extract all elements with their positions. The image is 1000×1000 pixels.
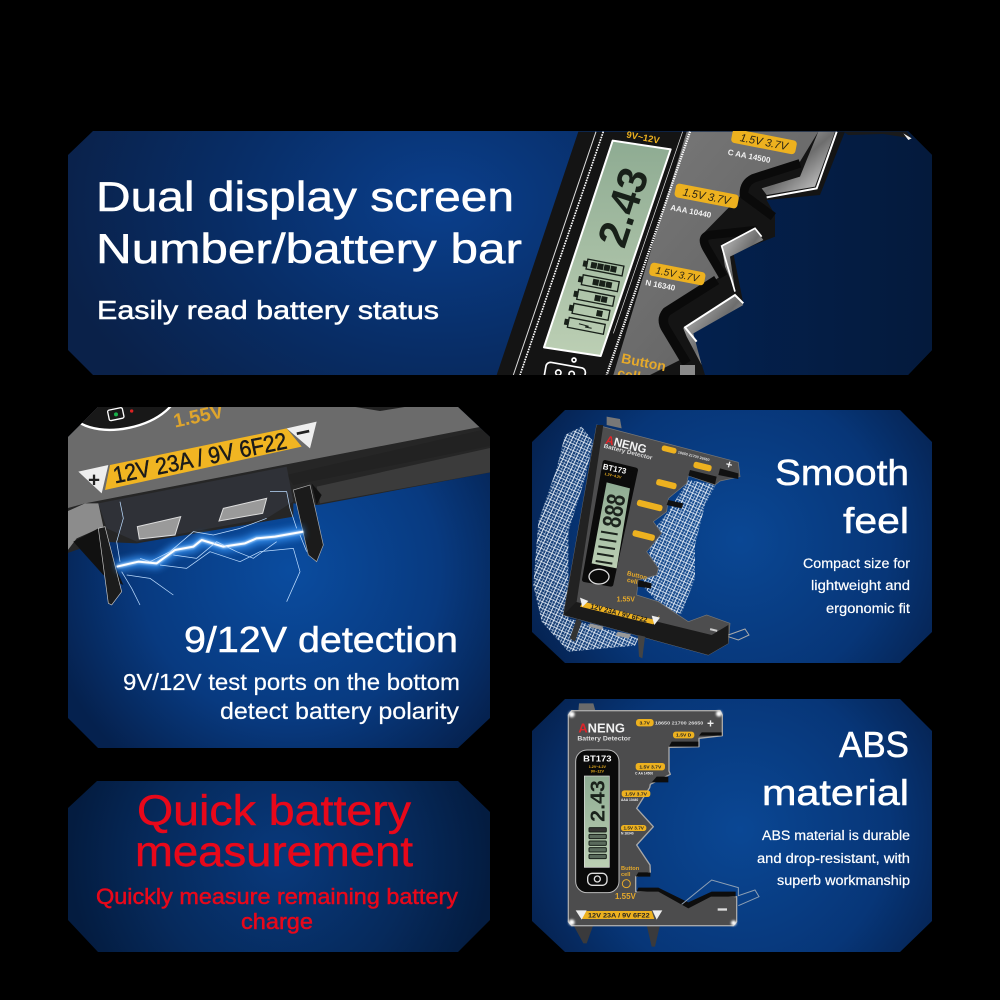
description: charge bbox=[241, 909, 313, 934]
heading: measurement bbox=[135, 828, 413, 876]
description: Compact size for bbox=[803, 556, 911, 571]
mesh hand bbox=[533, 427, 716, 652]
voltage labels: cell bbox=[616, 365, 642, 385]
heading: Smooth bbox=[775, 452, 909, 493]
voltage labels: AAA 10440 bbox=[670, 203, 713, 220]
voltage labels: cell bbox=[626, 577, 638, 586]
LCD module: 2.43 bbox=[586, 780, 609, 822]
device: tester front view bbox=[568, 703, 759, 947]
description bbox=[123, 669, 460, 724]
LCD module bbox=[584, 462, 636, 584]
test windows bbox=[137, 498, 267, 539]
heading: feel bbox=[843, 500, 909, 541]
yellow polarity label: 12V 23A / 9V 6F22 bbox=[588, 912, 650, 919]
yellow polarity label: + bbox=[88, 469, 100, 492]
voltage labels: C AA 14500 bbox=[727, 148, 772, 165]
description bbox=[803, 556, 911, 616]
description: superb workmanship bbox=[777, 873, 910, 888]
description: and drop-resistant, with bbox=[757, 851, 910, 866]
voltage labels: 18650 21700 26650 bbox=[677, 450, 710, 462]
heading bbox=[775, 452, 909, 541]
brand: ANENG bbox=[578, 722, 625, 736]
description: ABS material is durable bbox=[762, 828, 910, 843]
voltage labels: 1.5V 3.7V bbox=[639, 764, 662, 770]
test pins bbox=[98, 483, 323, 605]
voltage labels: Button bbox=[620, 350, 667, 374]
description: detect battery polarity bbox=[220, 698, 460, 724]
icon: tester glyph bbox=[544, 357, 586, 375]
panel: quick battery measurement bbox=[68, 781, 490, 952]
voltage labels: 18650 21700 26650 bbox=[655, 721, 704, 726]
heading bbox=[96, 173, 522, 272]
lightning arc bbox=[117, 492, 307, 605]
LCD module: BT173 bbox=[602, 462, 628, 476]
voltage labels bbox=[615, 716, 714, 901]
voltage labels: N 16340 bbox=[645, 278, 677, 293]
voltage labels: Button bbox=[626, 570, 648, 582]
heading: Number/battery bar bbox=[96, 225, 522, 272]
voltage labels: cell bbox=[621, 872, 631, 878]
voltage labels: Button bbox=[621, 866, 640, 872]
wire loop bbox=[682, 880, 759, 906]
brand: Battery Detector bbox=[577, 735, 631, 742]
voltage labels: + bbox=[707, 716, 714, 730]
voltage labels bbox=[616, 129, 797, 385]
heading bbox=[135, 787, 413, 876]
yellow polarity label bbox=[576, 910, 662, 920]
pins and wire loop bbox=[570, 618, 749, 658]
description: lightweight and bbox=[811, 578, 910, 593]
panel: 9/12V detection bbox=[68, 407, 490, 748]
brand bbox=[578, 724, 631, 742]
LCD module: 1.2V~4.2V bbox=[589, 765, 606, 769]
subheading: Easily read battery status bbox=[97, 295, 439, 325]
device: bottom edge with test pins bbox=[60, 358, 503, 605]
voltage labels: AAA 10440 bbox=[621, 798, 638, 802]
voltage labels: 1.5V 3.7V bbox=[682, 186, 733, 208]
heading bbox=[762, 724, 909, 813]
voltage labels bbox=[580, 445, 734, 625]
device: tester close-up with LCD bbox=[497, 129, 912, 388]
voltage labels: 9V~12V bbox=[626, 129, 661, 146]
description bbox=[757, 828, 910, 888]
heading: Dual display screen bbox=[96, 173, 514, 220]
panel: ABS material bbox=[532, 699, 932, 952]
voltage labels: 1.5V 3.7V bbox=[625, 791, 648, 797]
device: tester held in mesh hand bbox=[533, 417, 749, 658]
description: ergonomic fit bbox=[826, 601, 910, 616]
voltage labels: 3.7V bbox=[640, 721, 650, 727]
description bbox=[96, 884, 458, 934]
voltage labels: 1.5V 3.7V bbox=[655, 266, 701, 285]
voltage labels: 12V 23A / 9V 6F22 bbox=[590, 602, 648, 624]
voltage labels: 1.5V 3.7V bbox=[623, 826, 645, 831]
voltage labels: 1.5V D bbox=[676, 733, 692, 739]
heading: ABS bbox=[839, 724, 909, 765]
heading: Quick battery bbox=[137, 787, 412, 835]
LCD screen bbox=[544, 141, 671, 356]
voltage text: 1.55V bbox=[172, 401, 226, 433]
heading: material bbox=[762, 772, 909, 813]
brand: ANENG bbox=[604, 433, 648, 456]
LCD reading: 2.43 bbox=[588, 162, 658, 252]
voltage labels: 1.5V 3.7V bbox=[739, 132, 790, 153]
test pins bbox=[573, 925, 660, 947]
description: Quickly measure remaining battery bbox=[96, 884, 458, 909]
panel: dual display screen bbox=[68, 129, 932, 388]
panel: smooth feel bbox=[532, 410, 932, 663]
description: 9V/12V test ports on the bottom bbox=[123, 669, 460, 695]
voltage labels: 1.55V bbox=[615, 892, 637, 901]
icon: dial bbox=[80, 407, 172, 432]
LCD module: 1.2V~4.2V bbox=[604, 472, 622, 480]
LCD module: 9V~12V bbox=[591, 769, 604, 773]
voltage labels: + bbox=[724, 459, 734, 472]
corner rivets bbox=[569, 711, 736, 926]
voltage labels: N 16340 bbox=[621, 831, 634, 835]
yellow polarity label: 12V 23A / 9V 6F22 bbox=[111, 428, 289, 488]
LCD module: 888 bbox=[596, 492, 631, 530]
device: tester held in mesh hand: Battery Detector bbox=[603, 444, 654, 462]
LCD module bbox=[576, 750, 619, 893]
battery bars bbox=[564, 258, 624, 334]
LCD module: BT173 bbox=[583, 754, 612, 764]
voltage labels: 1.55V bbox=[617, 597, 635, 604]
voltage labels: C AA 14500 bbox=[635, 771, 653, 775]
heading: 9/12V detection bbox=[184, 619, 458, 660]
